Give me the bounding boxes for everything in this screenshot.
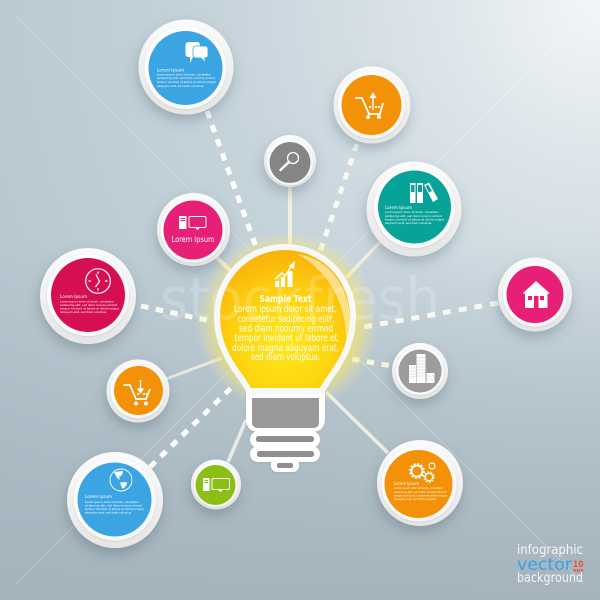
circle: blue globe xyxy=(67,452,163,548)
logo: infographic vector background: vector xyxy=(517,555,572,575)
text: crimson: tempor invidunt ut labore et dolore magna xyxy=(60,306,119,310)
bulb text: tempor invidunt ut labore et xyxy=(234,333,338,344)
icon: cart with down arrow xyxy=(124,380,150,406)
text: blue globe: Lorem Ipsum xyxy=(85,494,112,500)
text: blue globe: aliquyam erat, sed diam voluptua. xyxy=(85,510,132,514)
light bulb xyxy=(217,247,353,472)
circle: orange gears xyxy=(377,440,463,526)
icon: cart with up arrow xyxy=(355,92,383,119)
logo: infographic vector background: eps xyxy=(573,568,584,574)
icon: computer xyxy=(203,478,230,492)
text: blue chat: tempor invidunt ut labore et dolore magna xyxy=(157,80,216,84)
circle: teal binders xyxy=(366,162,462,256)
icon: gears xyxy=(410,463,435,482)
icon: speech bubbles xyxy=(186,42,208,63)
text: crimson: aliquyam erat, sed diam voluptua. xyxy=(60,310,107,314)
bulb highlight xyxy=(297,254,350,346)
text: blue globe: Lorem ipsum dolor sit amet, consetetur xyxy=(85,500,140,504)
icon: growth chart xyxy=(275,261,295,287)
icon: globe xyxy=(110,469,132,491)
text: blue chat: Lorem ipsum dolor sit amet, consetetur xyxy=(157,72,212,76)
text: teal xyxy=(385,205,444,225)
icon: buildings xyxy=(409,354,434,383)
text: teal: Lorem ipsum dolor sit amet, consetetur xyxy=(385,210,440,214)
circle: orange cart up xyxy=(334,66,410,144)
text: blue chat: Lorem Ipsum xyxy=(157,68,184,74)
text: crimson: sadipscing elitr, sed diam nonumy eirmod xyxy=(60,303,117,307)
text: blue globe: sadipscing elitr, sed diam nonumy eirmod xyxy=(85,504,142,508)
bulb text: sed diam voluptua. xyxy=(251,352,320,363)
icon: house xyxy=(522,281,550,308)
bulb base xyxy=(246,388,325,472)
text: teal: sadipscing elitr, sed diam nonumy eirmod xyxy=(385,214,442,218)
text: blue chat: aliquyam erat, sed diam voluptua. xyxy=(157,84,204,88)
text: crimson: Lorem ipsum dolor sit amet, consetetur xyxy=(60,299,115,303)
label: pink monitor: Lorem Ipsum xyxy=(172,235,214,244)
circle: blue chat xyxy=(138,20,234,114)
logo: infographic vector background: 10 xyxy=(573,560,584,570)
text: blue chat: sadipscing elitr, sed diam nonumy eirmod xyxy=(157,76,215,80)
icon: clock xyxy=(86,269,110,293)
text: blue chat xyxy=(157,68,216,88)
text: crimson: Lorem Ipsum xyxy=(60,294,87,300)
text: orange gears xyxy=(394,481,447,501)
circle: orange cart down xyxy=(106,360,170,422)
icon: binders xyxy=(410,182,438,203)
text: crimson xyxy=(60,294,119,314)
bulb text: Lorem ipsum dolor sit amet, xyxy=(234,304,337,315)
text: teal: Lorem Ipsum xyxy=(385,205,412,211)
bulb heading: Sample Text xyxy=(260,294,312,305)
bulb glow xyxy=(195,230,379,414)
logo: infographic vector background xyxy=(517,543,584,586)
logo: infographic vector background: background xyxy=(517,571,583,586)
text: orange gears: Lorem Ipsum xyxy=(394,481,419,486)
text: blue globe xyxy=(85,494,144,514)
circle: green computer xyxy=(191,460,241,510)
text: orange gears: aliquyam erat, sed diam voluptua. xyxy=(394,497,437,501)
bulb glass xyxy=(217,247,353,391)
circle: pink monitor xyxy=(157,193,230,266)
text: orange gears: tempor invidunt ut labore et dolore magna xyxy=(394,493,447,497)
icon: magnifier xyxy=(280,152,298,170)
connector lines xyxy=(141,111,498,467)
circle: grey buildings xyxy=(392,343,448,399)
text: orange gears: sadipscing elitr, sed diam nonumy eirmod xyxy=(394,490,446,494)
text: orange gears: Lorem ipsum dolor sit amet, consetetur xyxy=(394,486,444,490)
bulb text: sed diam nonumy eirmod xyxy=(239,324,333,334)
circle: pink home xyxy=(498,258,572,332)
logo: infographic vector background: infographic xyxy=(517,543,583,558)
text: teal: tempor invidunt ut labore et dolore magna xyxy=(385,218,444,222)
watermark: stockfresh xyxy=(160,265,440,333)
bulb text: dolore magna aliquyam erat, xyxy=(232,343,339,354)
circle: crimson clock xyxy=(40,248,136,344)
text: blue globe: tempor invidunt ut labore et dolore magna xyxy=(85,507,144,511)
icon: computer xyxy=(179,216,206,230)
text: teal: aliquyam erat, sed diam voluptua. xyxy=(385,221,432,225)
bulb text xyxy=(232,304,339,363)
bulb text: consetetur sadipscing elitr, xyxy=(238,314,334,325)
circle: grey magnifier xyxy=(264,135,316,187)
